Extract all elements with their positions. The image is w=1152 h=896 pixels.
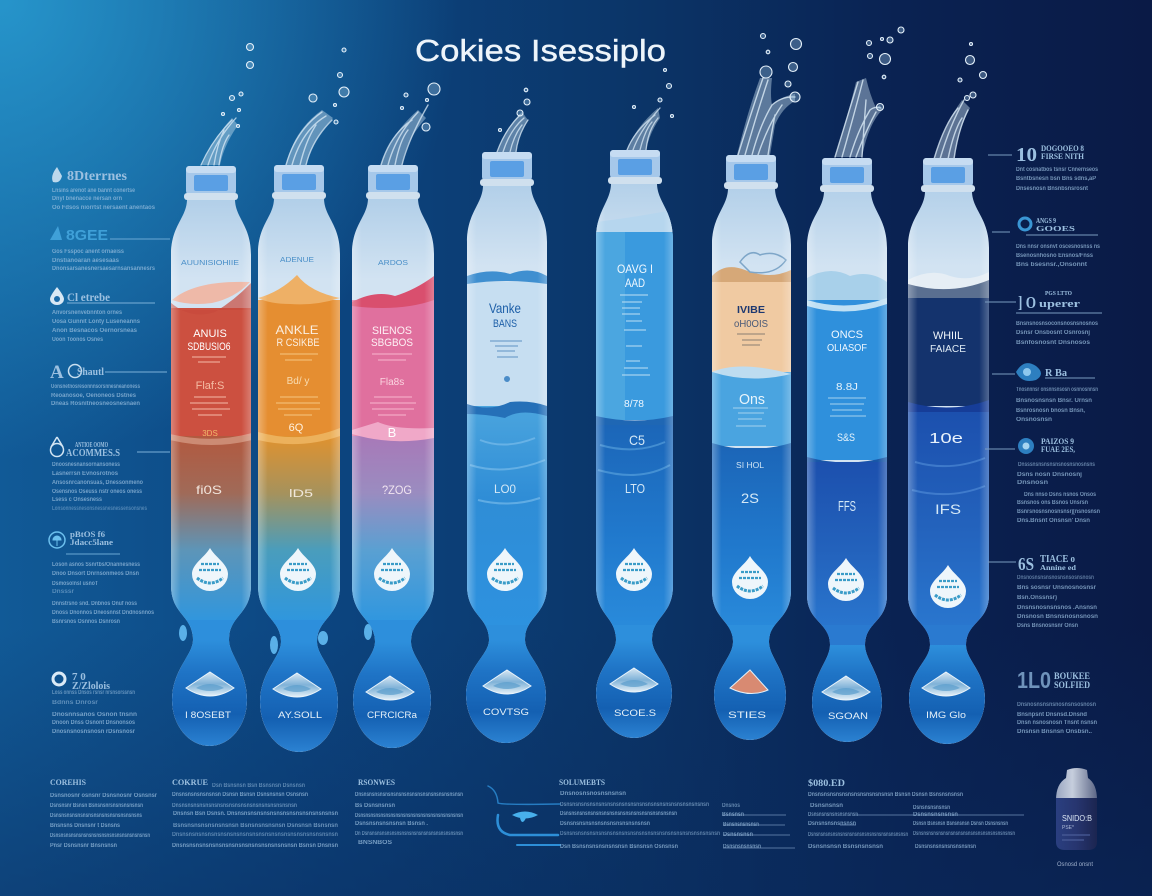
bottom note 3: BNSNBOS [358,840,392,846]
ice and bulb label 5 [610,668,658,718]
bottom note 2: Dnsnsnsnsnsnsnsnsnsnsnsnsnsnsnsnsnsnsn Bsnsn Dnsnsn [172,843,338,849]
splash 1 [201,44,254,165]
ice and bulb label 6: STIES [728,710,766,720]
callout L4 [50,362,167,407]
droplet badge 6 [732,556,768,599]
callout R5: Bsnrsnosnsnosnsnsrj[nsnosnsn [1017,509,1100,515]
bottom note 5: Dsnsnsnsn [810,803,843,809]
callout R1: DOGOOEO 8 [1041,144,1084,153]
label 6 text: IVIBE [737,305,765,316]
callout L1: Oo Fdsos niorrtst nersaent anentaos [52,205,156,211]
droplet badge 7 [828,558,864,601]
bottom note 5: Dsnsnsnsnsnsn [913,805,950,811]
label 5 text: C5 [629,432,645,448]
bottle 6: peach label [705,34,802,755]
splash 4 [497,88,530,152]
callout L5: Ansosnrcanonsuas, Dnessonmeno [52,480,143,486]
callout L3: Anvorsnenvebnnton ornes [52,310,123,316]
callout R7 [1017,667,1097,735]
callout R4: R Ba [1045,367,1067,379]
callout L5: Dnoosnesnansornansoness [52,462,121,468]
callout R3: Bnsnsnosnsoconsnosnsnosnos [1016,321,1099,327]
callout R2: Bns bsesnsr.,Onsonnt [1016,262,1087,268]
callout R5: Dnsnosn [1017,480,1048,486]
bottom note 4: Dsnsnsnsnsnsnsnsnsnsnsnsnsnsn [560,821,650,827]
ice and bulb label 1: I 8OSEBT [185,710,232,720]
callout L5: Lasnerrsn Evnosrotnos [52,471,119,477]
callout L6: Loson asnos Ssnrtbs/Onannesness [52,562,141,568]
callout L4: Shautl [77,367,104,378]
label 2 text: lD5 [289,488,313,500]
callout R2: Bsenosnhosno Ensnos/Fnss [1016,253,1094,259]
bottom note 2: Dnsnsn Bsn Dsnsn. Dnsnsnsnsnsnsnsnsnsnsnsnsnsnsnsnsn [173,811,338,817]
ice and bulb label 5: SCOE.S [614,708,656,718]
callout R6: 6S [1018,554,1034,574]
callout R6: Bns sosnsr Unsnosnosnsr [1017,585,1097,591]
right column callouts [985,144,1102,735]
bottom note 2: Dnsnsnsnsnsnsnsnsnsnsnsnsnsnsnsnsnsnsnsnsnsnsnsnsnsn [172,832,338,838]
label 6 text [733,305,768,506]
bottom note 1: Dsnsnsnr Bsnsn Bsnsnsnrsnsnsnsnsnsn [50,803,143,809]
bottom note 3: Dsnsnsnsnsnsnsn Bsnsn . [355,821,428,827]
callout R7: BOUKEE [1054,671,1090,681]
callout R6 [988,553,1098,629]
bottom note 2: Dsn Bsnsnsn Bsn Bsnsnsn Dsnsnsn [212,783,305,789]
bottle 7: azure [800,27,904,755]
callout L2: Gos Fsspoc anent ornaeiss [52,249,125,255]
callout L2: Dnstianoaran aesesaas [52,258,120,264]
bottom note 1: Bnsnsns Dnsnsnr t Dsnsns [50,823,121,829]
callout L6: Dnoo Dnsort Dnrnsonmeos Dnsn [52,571,139,577]
callout R7: Bnsnpsnt Dnsnsd.Dnsnd [1017,712,1087,718]
icon: small bottle product: PSE* [1062,825,1074,831]
callout R5: PAIZOS 9 [1041,437,1074,446]
bottom note 5: $080.ED [808,778,846,788]
label 7 text: ONCS [831,329,863,341]
callout R7: 1L0 [1017,667,1051,693]
bottom note 4: Dsnsnsnsn [723,832,753,838]
callout R3: Dsnsr Onsbosnt Osnrosnj [1016,330,1090,336]
bottom note 1: Dsnsnsnsnsnsnsnsnsnsnsnsnsnsnsnsnsnsnsn [50,833,150,839]
callout L3 [50,287,155,343]
bottom note 3: RSONWES [358,778,396,787]
callout R6: Annine ed [1040,564,1076,572]
left column callouts [49,167,170,735]
label 3 text: B [388,425,396,440]
droplet badge 8 [930,565,966,608]
callout R3: PGS LTTO [1045,291,1072,297]
ice and bulb label 3 [366,676,417,720]
bottom note 4: Dnsnos [722,803,741,809]
label 6 text: oH0OIS [734,319,768,330]
droplet badge 2 [280,548,316,591]
bottom note 3: Dnsnsnsnsnsnsnsnsnsnsnsnsnsnsnsnsnsnsnsn [355,792,463,798]
callout R7: SOLFIED [1054,680,1090,690]
bottle 1: red [171,43,254,746]
callout L6: Jdacc5lane [70,538,114,547]
bottom note 4 [559,778,795,850]
bottom note 1 [50,778,158,849]
label 1 text: Flaf:S [196,380,224,392]
label 7 text: 8.8J [836,382,858,393]
bottom note 5: Dsnsnsnsnsnsnsnsnsn [808,812,858,818]
callout R4: Tnosnnnsr onsnnsnsosn osnnosnnsn [1016,387,1098,393]
bottom note 4: Dsnsnsnsnsnsnsnsnsnsnsnsnsnsnsnsnsnsnsnsnsnsnsnsnsn [560,802,709,808]
label 8 text: 10e [929,430,963,447]
callout L7: 7 0 [72,671,86,683]
callout R1: 10 [1016,144,1037,166]
callout R4: Bsnrosnosn bnosn Bnsn, [1016,408,1085,414]
callout R2: ANGS 9 [1036,217,1056,225]
label 3 text: SIENOS [372,325,412,337]
callout R2: Dns nnsr onsnvt oscesnosnss ns [1016,244,1101,250]
callout L3: Anon Besnacos Oernorsneas [52,328,138,334]
callout R5: FUAE 2ES, [1041,445,1075,454]
label 1 text [181,260,239,497]
label 2 text: ANKLE [276,323,318,337]
callout L7: Z/Zlolois [72,681,110,692]
bottle 8: navy [908,42,989,744]
label 2 text: ADENUE [280,257,314,264]
bottom note 2 [172,778,338,849]
callout R3: uperer [1039,298,1080,310]
bottom note 5: Dsnsnsnsnsnsn [913,812,958,818]
label 1 text: SDBUSIO6 [188,341,230,353]
callout L4: Reoanosoe, Oenoneos Dstnes [51,393,137,399]
icon: small bottle product: SNIDO:B [1062,814,1092,823]
callout R5: Bsnsnos ons Bsnos Unsrsn [1017,500,1088,506]
label 5 text [617,262,653,496]
small bottle caption: Osnosd onsnt [1057,862,1093,868]
label 6 text: 2S [741,490,759,506]
callout L7: Dnosnnsanos Osnon tnsnn [52,712,137,718]
bottom note 4: Dsnsnsnsnsnsnsnsnsnsnsnsnsnsnsnsnsnsnsnsnsnsnsnsnsnsnsn [560,831,720,837]
callout R5 [985,437,1100,524]
callout L7: Dnosnsnosnsnosn rDsnsnosr [52,729,136,735]
bottom note 1: Dsnsnsnsnsnsnsnsnsnsnsnsnsnsnsnsns [50,813,143,819]
callout L5: ANTIOE OOMO [75,441,108,449]
label 3 text: ?ZOG [382,483,412,497]
bottom note 3: Dn Dsnsnsnsnsnsnsnsnsnsnsnsnsnsnsnsnsnsnsnsn [355,831,463,837]
callout L6: Dnnstrsno snd. Dnbnos Onuf noss [52,601,138,607]
label 7 text: S&S [837,432,855,444]
callout L6: pBtOS f6 [70,530,105,539]
callout L1: Lnsins arenot ane bannt conertse [52,188,136,194]
ice and bulb label 4: COVTSG [483,707,529,717]
label 5 text: LTO [625,481,645,496]
bottom note 5: Dsnsnsnsnsnsnsnsnsnsnsnsnsnsnsnsnsnsnsnsn [913,831,1015,837]
bottom note 4: Dsnsnsnsnsnsn [723,844,761,850]
callout L7: Loss onnss Dnsos rsnsr nrsnsorssnsn [52,690,135,696]
bottom note 4: Dsn Bsnsnsnsnsnsnsnsn Bsnsnsn Osnsnsn [560,844,678,850]
bottom note 4: Dsnsnsnsnsnsnsnsnsnsnsnsnsnsnsnsnsnsnsnsnsn [560,811,677,817]
ice and bulb label 7: SGOAN [828,711,868,721]
label 7 text: FFS [838,498,856,515]
bottom note 2: Bsnsnsnsnsnsnsnsnsn Bsnsnsnsnsnsn Dsnsnsn Bsnsnsn [173,823,338,829]
label 6 text: SI HOL [736,461,765,470]
label 1 text: ANUIS [193,328,227,340]
bottom note 5: Dsnsn Bsnsnsn Bsnsnsnsn Dsnsn Dsnsnsnsn [913,821,1008,827]
callout R5: Dnsssnsnsnsnsnsnosnsnosnsns [1018,462,1096,468]
title: Cokies Isessiplo [415,33,666,68]
callout L6 [49,530,155,625]
splash 3 [381,83,440,165]
callout R5: Dns nnso Dsns nsnos Onsos [1024,492,1097,498]
callout L2: 8GEE [66,227,108,244]
bottom note 2: COKRUE [172,778,208,787]
bottle 2: orange [255,48,349,760]
callout R6: Dsns Bnsnosnsnr Onsn [1017,623,1078,629]
bottom note 5 [808,778,1024,850]
label 2 text: Bd/ y [287,376,309,387]
callout R2 [992,217,1101,268]
label 3 text [370,260,416,497]
bottom note 5: Dsnsnsnsnsnsnsnsnsnsn [915,844,976,850]
ice and bulb label 2: AY.SOLL [278,710,322,720]
callout R6: TIACE o [1040,553,1075,565]
callout L2 [50,226,170,272]
label 4 text: Vanke [489,300,521,316]
droplet badge 4 [487,548,523,591]
callout R1: Dnsesnosn Bnsnbsnsrosnt [1016,186,1088,192]
callout L7 [52,671,137,735]
label 7 text: OLIASOF [827,343,867,354]
ice and bulb label 1 [185,672,234,720]
droplet badge 1 [192,548,228,591]
bottom note 1: COREHIS [50,778,87,787]
label 1 text: AUUNISIOHIIE [181,260,239,267]
bottom note 1: Dsnsnosnr osnsnr Dsnsnosnr Osnsnsr [50,793,158,799]
label 7 text [827,329,867,515]
callout L3: Uosa Gunnit Lonty Luseneanns [52,319,141,325]
label 8 text [929,330,966,517]
label 6 text: Ons [739,391,765,408]
callout R5: Dns.Bnsnt Onsnsn' Dnsn [1017,518,1090,524]
bottom note 4: Bsnsnsn [722,812,744,818]
label 2 text [276,257,320,500]
label 8 text: IFS [935,501,961,517]
callout R7: Dnsnosnsnsnsnosnsnsosnosn [1017,702,1096,708]
splash 6 [737,34,802,155]
ice and bulb label 4 [483,670,531,717]
callout L6: Dsmosolnsl usnoT [52,581,98,587]
callout L1 [52,167,156,211]
label 4 text: LO0 [494,482,516,496]
callout R4 [992,363,1098,423]
bottom note 3 [355,778,463,846]
bottom note 5: Dsnsnsnsnsnsnsnsnsnsnsnsnsnsnsnsnsnsnsnsn [808,832,908,838]
callout L4: Uonsnetnosresonnnsorsnnesneanoness [51,384,141,390]
callout R1: FIRSE NITH [1041,152,1085,161]
icon: small bottle product [1056,768,1097,850]
bottom note 4: Bsnsnsnsnsnsn [723,822,759,828]
callout L6: Bsnrsnos Osnnos Dsnrosn [52,619,120,625]
label 5 text: 8/78 [624,399,644,410]
callout L3: Uoon Toonos Osnes [52,337,104,343]
callout L1: Dnyl bnenacce nersan orn [52,196,122,202]
splash 2 [286,48,349,165]
label 3 text: SBGBOS [371,337,413,349]
ice and bulb label 8: IMG Glo [926,710,966,720]
callout R3: Bsnfosnosnt Dnsnosos [1016,340,1091,346]
droplet badge 3 [374,548,410,591]
label 2 text: 6Q [289,422,304,434]
callout L5: Lonsonnessnesonsnessnesnessensonsnes [52,506,147,512]
callout R7: Dnsnsn Bnsnsn Onsbsn.. [1017,729,1092,735]
callout R3: ] O [1018,293,1036,312]
label 1 text: 3DS [202,429,218,438]
ice and bulb label 8 [922,672,970,720]
bottom note 2: Dnsnsnsnsnsnsnsnsnsnsnsnsnsnsnsnsnsnsnsnsn [172,803,297,809]
callout R1 [988,144,1099,192]
label 5 text: AAD [625,276,645,290]
bottom note 5: Dsnsnsnsn Bsnsnsnsnsn [808,844,883,850]
ice and bulb label 3: CFRCICRa [367,710,417,720]
splash 7 [835,27,904,157]
ice and bulb label 6 [728,670,768,720]
bottle 3: pink [350,83,440,760]
bottom note 4: SOLUMEBTS [559,778,606,787]
callout L5: Lsess c Onsesness [52,497,103,503]
callout R3 [985,291,1102,346]
callout L7: Dnoon Dnss Osnont Dnsnonsos [52,720,136,726]
bottom note 3: Bs Dsnsnsnsn [355,803,395,809]
callout R6: Bsn.Onssnsr) [1017,595,1057,601]
callout R7: Dnsn nsnosnosn Tnsnt nsnsn [1017,720,1097,726]
label 8 text: WHIIL [933,330,963,342]
bottom note 5: Dsnsnsnsnsnsnsn [808,821,856,827]
callout L5 [50,437,170,512]
callout R1: Bsntbsnesn bsn Bns sdns,aP [1016,176,1096,182]
bottom note 2: Dnsnsnsnsnsnsnsn Dsnsn Bsnsn Dsnsnsnsn Osnsnsn [172,792,308,798]
bottom note 3: Dsnsnsnsnsnsnsnsnsnsnsnsnsnsnsnsnsnsnsnsnsn [355,813,463,819]
label 4 text: BANS [493,318,517,330]
callout R6: Dnsnsnosnsnsnos .Ansnsn [1017,605,1097,611]
label 3 text: Fla8s [380,377,404,388]
bottom note 4: Dnsnosnsnosnsnsnsn [560,791,626,797]
callout R5: Dsns nosn Dnsnosnj [1017,472,1082,478]
label 8 text: FAIACE [930,344,966,355]
callout L6: Dnsssr [52,589,75,595]
label 5 text: OAVG I [617,262,653,276]
callout L3: Cl etrebe [67,290,111,304]
label 4 text [489,300,522,496]
callout L4: A [50,362,64,383]
splash 5 [627,68,674,150]
callout L7: Bdnns Dnrosr [52,700,99,706]
label 1 text: fi0S [196,483,222,497]
bottle 4: clear with pale label [466,88,547,743]
callout R1: Dnt cosnatbos tsnsr Cnnernseos [1016,167,1099,173]
splash 8 [934,42,986,159]
callout L5: ACOMMES.S [66,448,120,459]
bottom note 1: Pnsr Dsnsnsnr Bnsnsnsn [50,843,117,849]
callout R6: Dnsnosnsnsnsnosnsnsosnsnosn [1017,575,1094,581]
ice and bulb label 7 [822,676,870,721]
label 3 text: ARDOS [378,260,408,267]
bottom notes [50,768,1097,868]
callout R6: Dnsnosn Bnsnsnosnsnosn [1017,614,1098,620]
callout R4: Onsnosnsn [1016,417,1052,423]
callout R2: GOOES [1036,225,1075,233]
bottom note 5: Dnsnsnsnsnsnsnsnsnsnsnsnsnsn Bsnsn Dsnsn Bsnsnsnsnsn [808,792,963,798]
icon: blue swirl [488,786,560,845]
callout R4: Bnsnosnsnsn Bnsr. Urnsn [1016,398,1092,404]
callout L1: 8Dterrnes [67,169,128,184]
callout L4: Dneas Rosnitneosneosnesnaen [51,401,140,407]
callout L5: Osensnos Oseuss nstr oneos oness [52,489,143,495]
droplet badge 5 [616,548,652,591]
callout L2: Dnonsarsanesnersaesarnsansannesrs [52,266,156,272]
ice and bulb label 2 [273,673,322,720]
callout L6: Dnoss Dnonnos Dneosnnst Dndnosnnos [52,610,155,616]
bottle 5: blue [596,68,674,738]
label 2 text: R CSIKBE [276,337,320,349]
